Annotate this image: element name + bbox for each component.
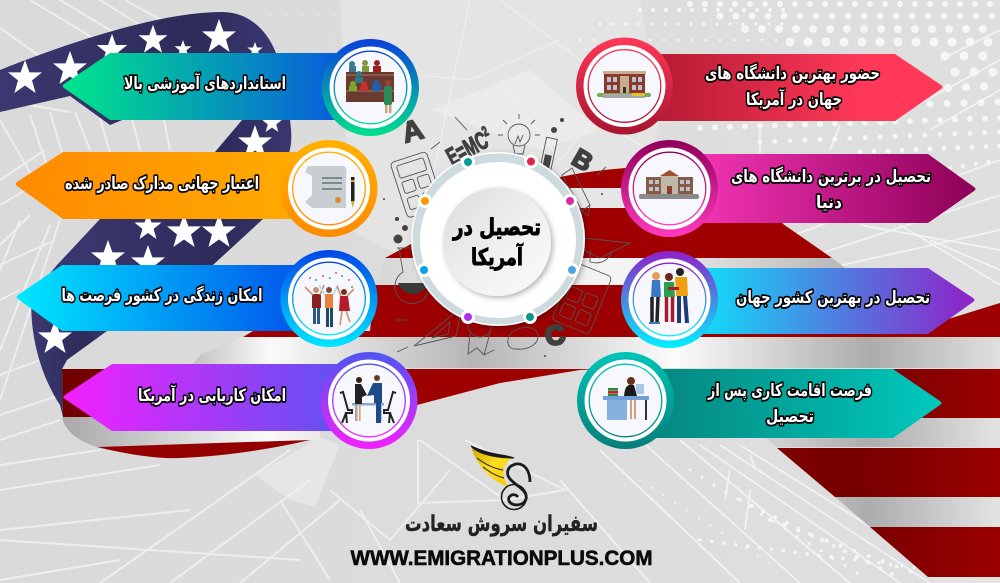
panel: top universities (right 2) xyxy=(621,140,976,237)
label: تحصیل در برترین دانشگاه های xyxy=(731,166,931,187)
panel: post-study work permit (right 4) xyxy=(577,352,942,449)
label: استانداردهای آموزشی بالا xyxy=(124,72,286,94)
icon: students xyxy=(649,268,688,324)
icon: university building xyxy=(597,71,651,98)
icon: classroom xyxy=(346,60,394,113)
mortarboard xyxy=(583,238,630,263)
calculator xyxy=(390,151,444,218)
label: تحصیل در بهترین کشور جهان xyxy=(736,288,930,308)
panel: recognised documents (left 2) xyxy=(16,140,378,237)
calculator 2 xyxy=(552,262,612,334)
doodles: education icons xyxy=(383,113,630,357)
hub title: آمریکا xyxy=(471,242,524,271)
center hub xyxy=(411,152,585,326)
letters and formula: E=MC xyxy=(441,121,502,171)
stars xyxy=(8,19,282,353)
label: امکان زندگی در کشور فرصت ها xyxy=(62,285,262,306)
panel: best country (right 3) xyxy=(621,251,974,348)
letters and formula xyxy=(399,113,598,352)
dots xyxy=(270,4,1000,578)
triangle ruler xyxy=(414,307,462,346)
apple xyxy=(508,327,538,349)
flask xyxy=(395,248,429,303)
dots and clips xyxy=(383,118,603,357)
letters and formula: 2 xyxy=(479,122,491,140)
letters and formula: A xyxy=(399,113,427,150)
panel: best universities (right 1) xyxy=(576,38,942,134)
letters and formula: C xyxy=(543,319,567,352)
icon: office worker xyxy=(603,377,649,420)
pencil xyxy=(562,168,590,216)
red and white stripes xyxy=(556,167,640,188)
label: فرصت اقامت کاری پس از xyxy=(707,381,872,401)
hub nodes xyxy=(418,156,578,322)
navy ribbon xyxy=(0,12,291,417)
letters and formula: B xyxy=(567,142,598,178)
hub title xyxy=(452,215,541,271)
website: WWW.EMIGRATIONPLUS.COM xyxy=(350,546,652,570)
panel: land of opportunity (left 3) xyxy=(16,250,378,347)
panel: employment (left 4) xyxy=(64,352,418,449)
company name: سفیران سروش سعادت xyxy=(405,512,598,537)
panel: standards (left 1) xyxy=(62,39,419,136)
label: اعتبار جهانی مدارک صادر شده xyxy=(65,174,259,194)
logo xyxy=(350,446,652,570)
award ribbon xyxy=(468,313,494,355)
panel: post-study work permit (right 4): تحصیل xyxy=(766,407,814,427)
right fan lines xyxy=(560,30,1000,583)
icon: handshake xyxy=(340,375,396,423)
label: امکان کاریابی در آمریکا xyxy=(138,384,286,406)
lightbulb xyxy=(498,114,540,154)
label: حضور بهترین دانشگاه های xyxy=(705,63,880,84)
panel: best universities (right 1): جهان در آمریکا xyxy=(746,88,842,110)
panel: top universities (right 2): دنیا xyxy=(816,193,842,213)
icon: celebrating people xyxy=(305,272,354,327)
icon: winged S xyxy=(471,446,530,510)
test tube xyxy=(538,137,557,178)
hub title: تحصیل در xyxy=(452,215,541,241)
icon: scroll and pen xyxy=(305,166,354,208)
icon: college building xyxy=(639,170,699,199)
